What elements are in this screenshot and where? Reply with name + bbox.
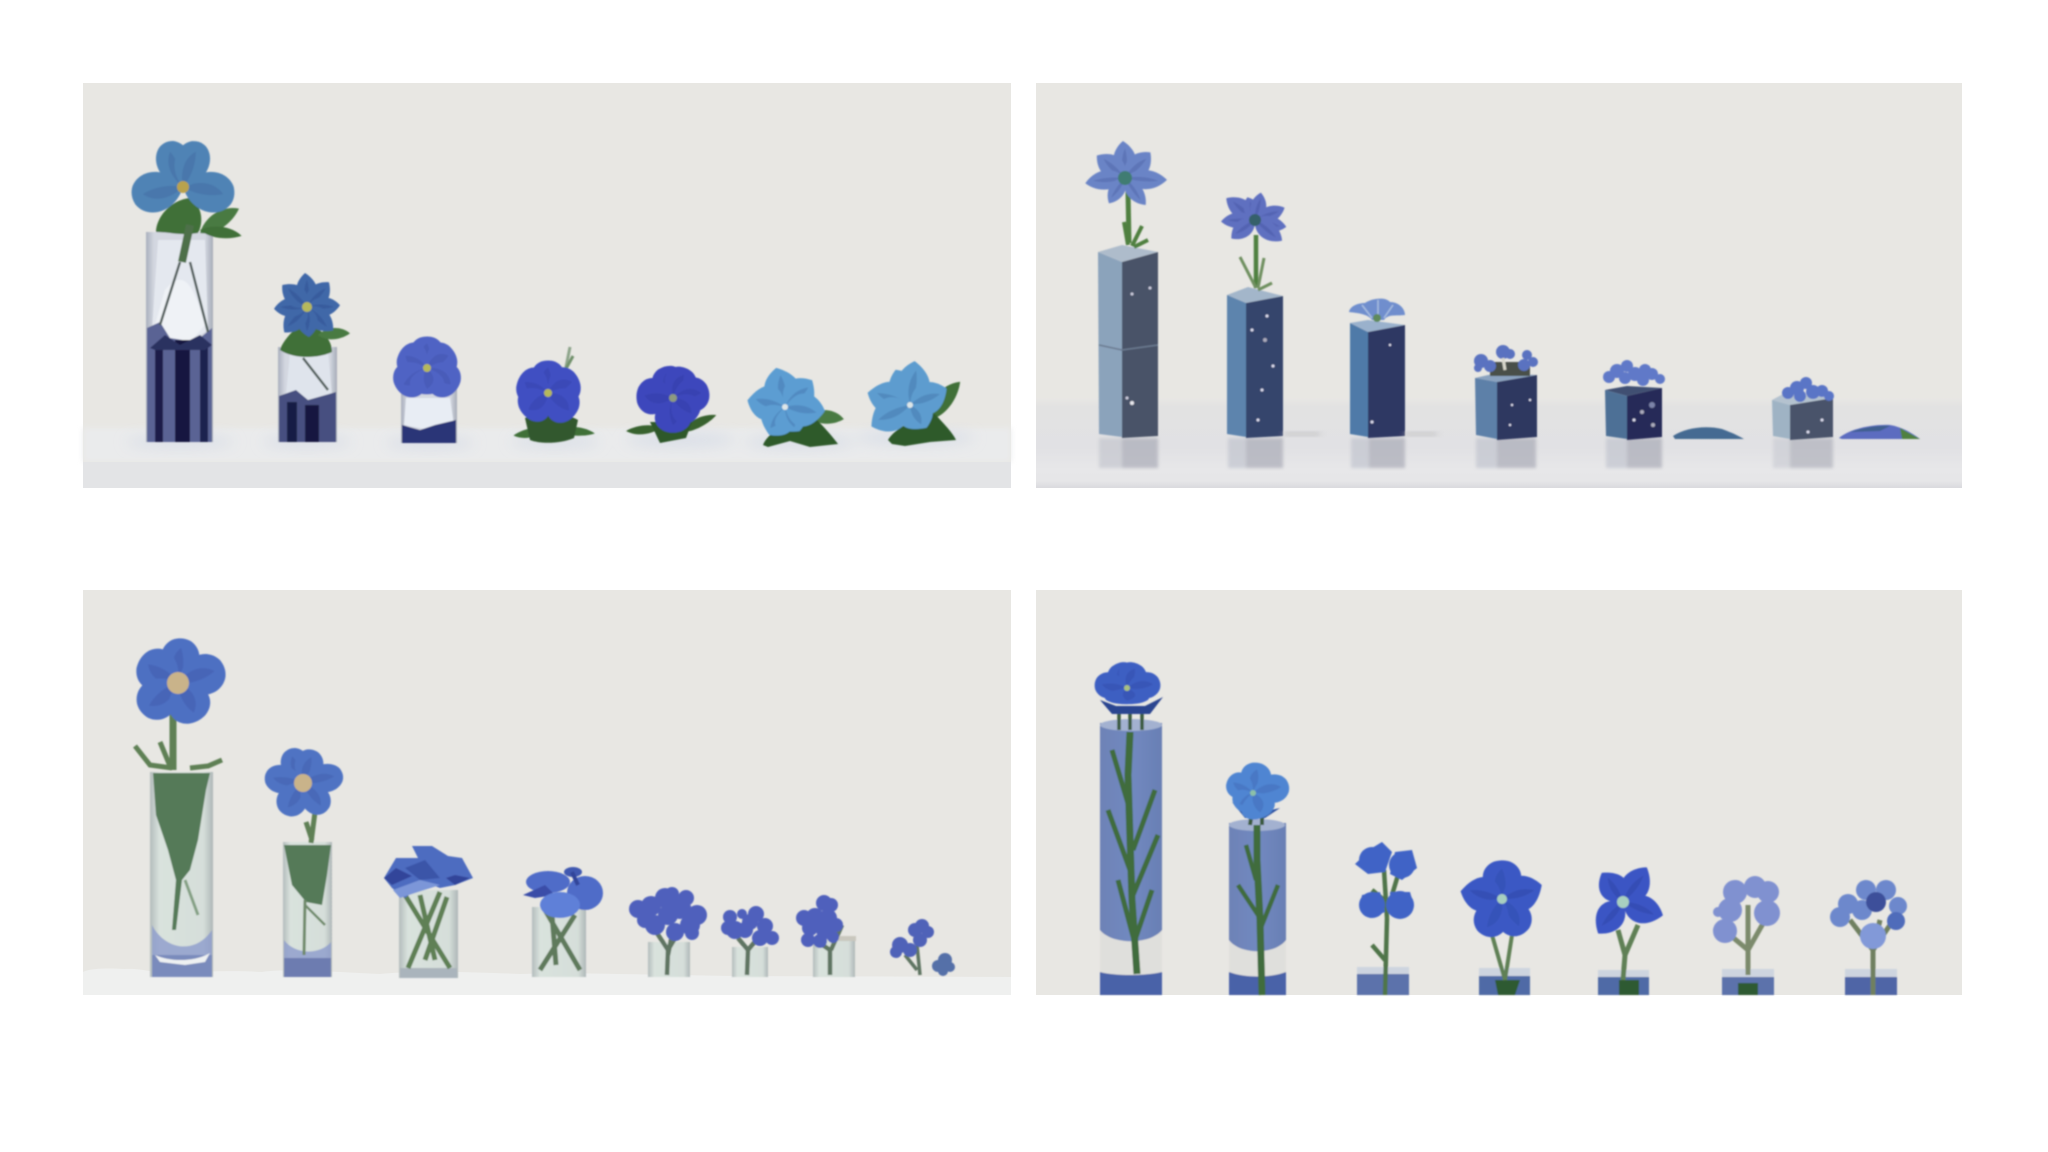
tree flower 5	[629, 887, 707, 975]
vase 3	[1357, 967, 1409, 995]
vase 2	[283, 842, 332, 977]
flower 5 with stems	[1586, 860, 1667, 980]
vase 6	[732, 947, 768, 977]
tree flower 7	[796, 895, 843, 975]
flower 1 with stem	[1093, 658, 1163, 974]
vase 4	[532, 907, 586, 977]
block 6	[1772, 393, 1833, 440]
panel background	[83, 590, 1011, 995]
flower cluster on block 5	[1603, 360, 1665, 386]
fallen flower 8	[890, 919, 955, 976]
block reflections	[1099, 438, 1833, 468]
vase 3	[401, 387, 457, 443]
block 3 shadow	[1405, 432, 1437, 436]
vase 1	[146, 232, 213, 442]
panel: bottom left, flowers in clear glass vases	[83, 590, 1011, 995]
flower 6 with leaves	[744, 365, 845, 447]
flower 2 on stalk	[1221, 190, 1288, 290]
flower 3 on block	[1349, 299, 1405, 322]
vase 7	[813, 936, 856, 977]
vase 2	[1229, 819, 1286, 995]
flower 1 on stalk	[1084, 141, 1168, 247]
flower cluster on block 6	[1782, 377, 1834, 402]
flower cluster on block 4	[1474, 345, 1538, 376]
fallen petal 1	[1673, 427, 1744, 439]
block 3	[1350, 320, 1405, 438]
flower 4 bouquet	[523, 867, 603, 970]
block 2 shadow	[1284, 432, 1320, 436]
flower 1 with stem and foliage	[129, 637, 231, 930]
block 2	[1227, 287, 1283, 438]
vase 6	[1722, 969, 1774, 995]
fallen petal 2	[1839, 425, 1920, 439]
flower 4 with leaves	[511, 347, 595, 443]
flower 6 light cluster	[1713, 876, 1780, 975]
panel: bottom right, flowers in blue water vases	[1036, 590, 1962, 995]
tree flower 6	[721, 906, 779, 975]
flower 3 double head	[1355, 842, 1417, 995]
vase 5	[648, 942, 690, 977]
flower 2 with leaves	[274, 273, 350, 390]
flower 3 bouquet	[384, 846, 473, 968]
vase 7	[1845, 969, 1897, 995]
vase 2	[278, 347, 337, 442]
flower 7 cluster	[1830, 880, 1907, 995]
flower 1 with leaves	[128, 136, 243, 262]
flower 5 with leaves	[626, 362, 718, 443]
panel background	[1036, 590, 1962, 995]
vase 1	[1100, 719, 1162, 995]
flower 3	[387, 336, 467, 404]
flower 2 with stem and foliage	[262, 744, 346, 955]
panel: top right, flowers on stone blocks	[1036, 83, 1962, 488]
vase 3	[399, 890, 458, 978]
block 5	[1605, 386, 1662, 440]
flower 2 with stem	[1222, 760, 1292, 995]
snow smudges	[125, 431, 975, 449]
flower 4 with stems	[1457, 860, 1547, 980]
flower 7 with leaves	[863, 359, 966, 446]
vase 5	[1598, 970, 1649, 995]
panel: top left, flowers in ice vases	[83, 83, 1011, 488]
panel background	[1036, 83, 1962, 488]
vase 4	[1479, 968, 1530, 995]
block 4	[1475, 373, 1537, 440]
vase 1	[150, 772, 213, 977]
block 1	[1098, 245, 1158, 438]
panel background	[83, 83, 1011, 488]
